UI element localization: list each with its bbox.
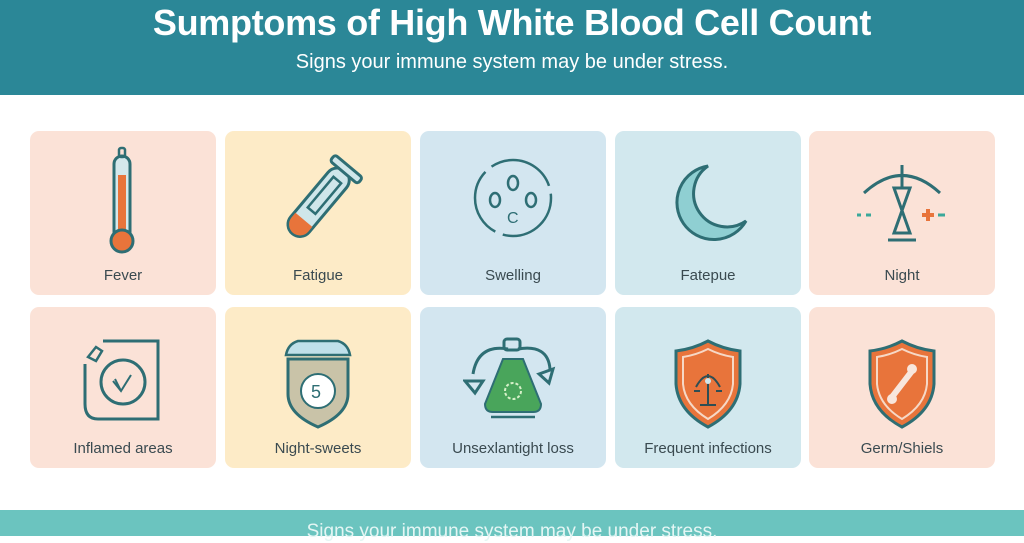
icon: cell: C bbox=[507, 210, 519, 227]
icon: hourglass scale bbox=[857, 165, 945, 242]
icon: shield clock bbox=[284, 340, 352, 429]
card: Night bbox=[809, 131, 995, 295]
icon: shield bone bbox=[868, 339, 936, 429]
footer banner bbox=[0, 510, 1024, 536]
header banner bbox=[0, 0, 1024, 95]
card: Swelling bbox=[420, 131, 606, 295]
label: Swelling bbox=[485, 267, 541, 284]
label: Unsexlantight loss bbox=[452, 440, 574, 457]
card: Fatepue bbox=[615, 131, 801, 295]
icon: cell bbox=[474, 158, 552, 238]
card: Fever bbox=[30, 131, 216, 295]
icon: scale bag bbox=[463, 338, 556, 418]
label: Frequent infections bbox=[644, 440, 772, 457]
label: Inflamed areas bbox=[73, 440, 173, 457]
label: Fatigue bbox=[293, 267, 343, 284]
card: Unsexlantight loss bbox=[420, 307, 606, 468]
card: Frequent infections bbox=[615, 307, 801, 468]
label: Night-sweets bbox=[275, 440, 361, 457]
label: Germ/Shiels bbox=[861, 440, 943, 457]
label: Fever bbox=[104, 267, 142, 284]
label: Night bbox=[884, 267, 920, 284]
label: Fatepue bbox=[680, 267, 736, 284]
icon: moon bbox=[675, 164, 748, 241]
title: Sumptoms of High White Blood Cell Count bbox=[153, 2, 871, 43]
icon: shield orange bbox=[674, 339, 742, 429]
subtitle: Signs your immune system may be under stress. bbox=[296, 51, 728, 73]
footer text: Signs your immune system may be under stress. bbox=[307, 521, 717, 542]
icon: thermometer bbox=[110, 146, 134, 254]
icon: test tube bbox=[286, 154, 363, 238]
icon: shield clock: 5 bbox=[311, 382, 321, 402]
card: Germ/Shiels bbox=[809, 307, 995, 468]
card: Night-sweets bbox=[225, 307, 411, 468]
icon: inflamed bbox=[84, 340, 160, 420]
card: Fatigue bbox=[225, 131, 411, 295]
card: Inflamed areas bbox=[30, 307, 216, 468]
